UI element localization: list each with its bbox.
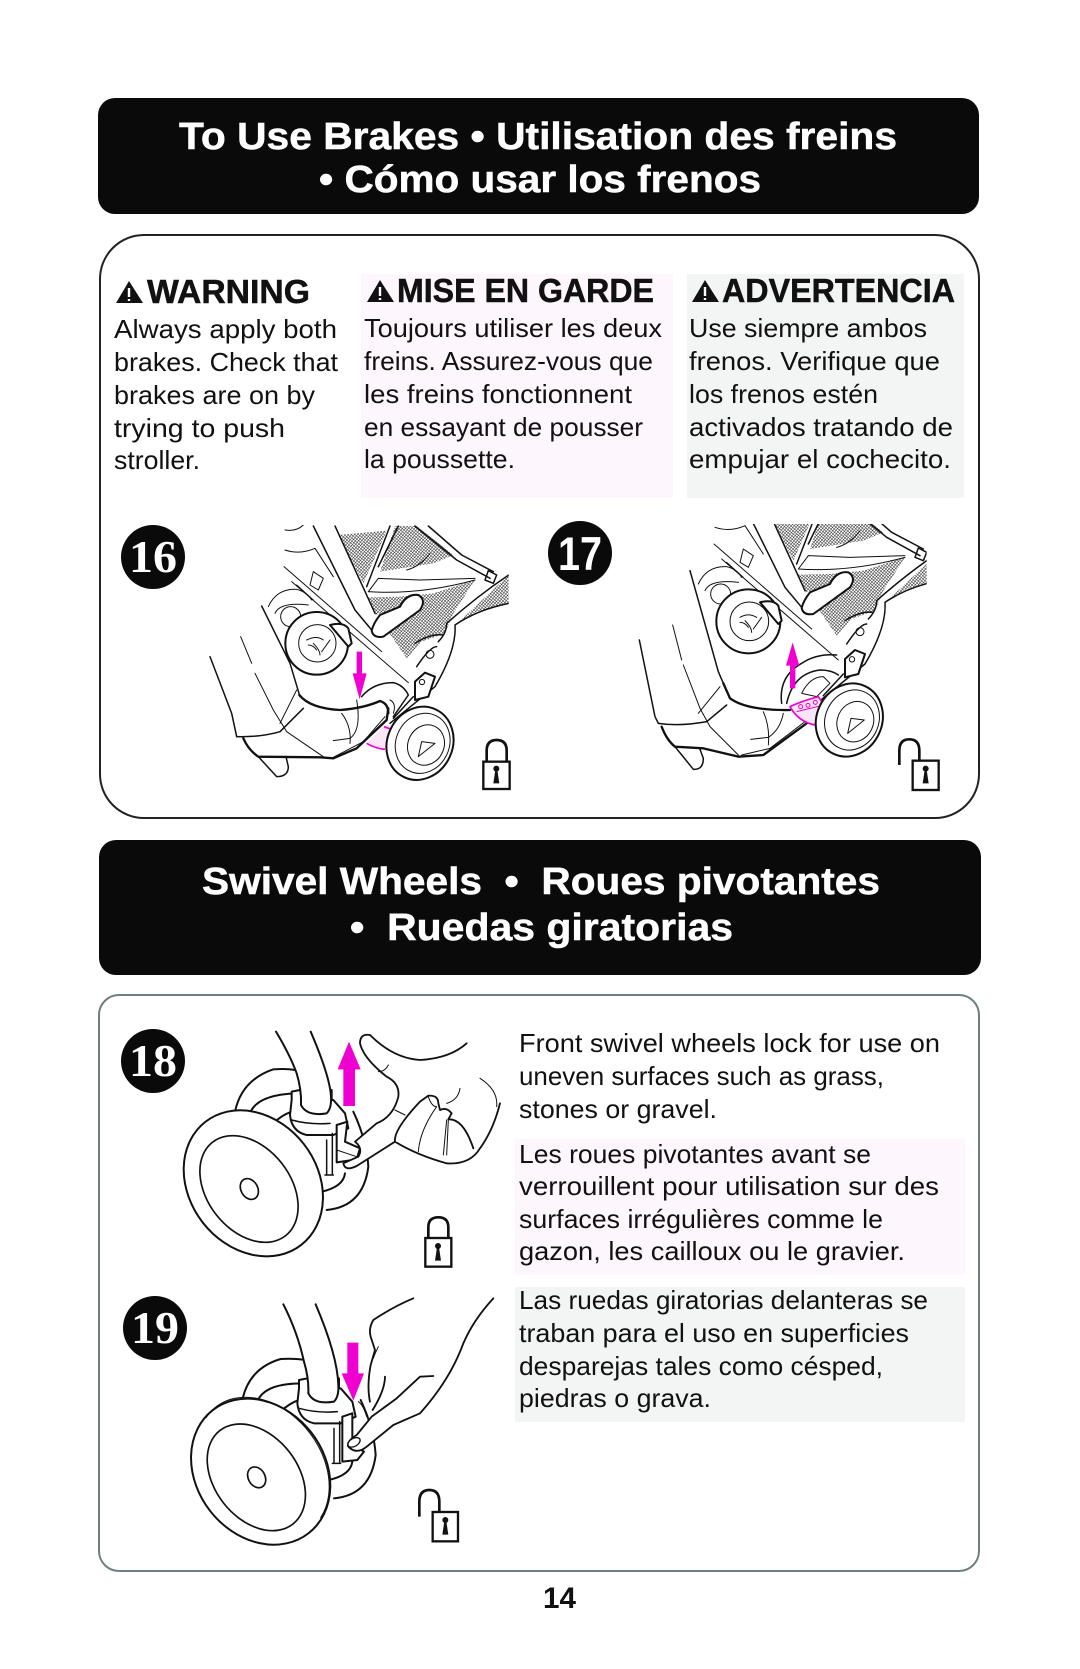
warning column: French bbox=[361, 272, 673, 498]
warning column: Spanish: Use siempre ambos bbox=[689, 313, 927, 343]
header: swivel wheels bbox=[99, 840, 981, 975]
illustration: pressing swivel lock bbox=[162, 1298, 493, 1573]
text block: French bbox=[515, 1139, 965, 1275]
hand bbox=[343, 1035, 500, 1168]
warning column: English: brakes are on by bbox=[114, 380, 315, 410]
text block: Spanish: piedras o grava. bbox=[519, 1383, 711, 1413]
illustration: lifting swivel lock bbox=[155, 1032, 500, 1284]
warning column: Spanish: empujar el cochecito. bbox=[689, 444, 951, 474]
text block: English: stones or gravel. bbox=[519, 1094, 717, 1124]
text block: French: surfaces irrégulières comme le bbox=[519, 1204, 883, 1234]
text block: Spanish: desparejas tales como césped, bbox=[519, 1351, 883, 1381]
leg and boot bbox=[639, 640, 658, 723]
warning column: French: les freins fonctionnent bbox=[364, 379, 633, 409]
warning column: Spanish: frenos. Verifique que bbox=[689, 346, 940, 376]
warning column: French: en essayant de pousser bbox=[364, 412, 643, 442]
arrow: up bbox=[786, 642, 799, 688]
icon: locked padlock bbox=[425, 1217, 451, 1267]
step number 17: 17 bbox=[558, 527, 602, 580]
text block: French: Les roues pivotantes avant se bbox=[519, 1139, 871, 1169]
step number 18 bbox=[121, 1029, 185, 1093]
leg and boot bbox=[210, 657, 237, 737]
step number 16 bbox=[121, 525, 185, 589]
arrow: up bbox=[338, 1042, 361, 1106]
header: swivel wheels: • Ruedas giratorias bbox=[350, 907, 733, 949]
text block: English: Front swivel wheels lock for use on bbox=[519, 1028, 940, 1058]
header: to use brakes: • Cómo usar los frenos bbox=[319, 159, 761, 201]
step number 17 bbox=[548, 521, 612, 585]
warning column: Spanish: ADVERTENCIA bbox=[722, 272, 955, 309]
icon: warning triangle bbox=[116, 281, 143, 303]
warning column: English: WARNING bbox=[147, 273, 310, 310]
warning column: Spanish: activados tratando de bbox=[689, 412, 953, 442]
text block: English: uneven surfaces such as grass, bbox=[519, 1061, 884, 1091]
arrow: down bbox=[342, 1343, 364, 1401]
warning column: Spanish: los frenos estén bbox=[689, 379, 878, 409]
warning column: English: brakes. Check that bbox=[114, 347, 339, 377]
page number: 14 bbox=[543, 1582, 576, 1615]
header: to use brakes bbox=[98, 98, 979, 214]
warning column: French: la poussette. bbox=[364, 444, 515, 474]
step number 16: 16 bbox=[129, 531, 177, 582]
warning column: English: stroller. bbox=[114, 445, 200, 475]
warning column: French: MISE EN GARDE bbox=[397, 272, 654, 309]
text block: Spanish: Las ruedas giratorias delanteras se bbox=[519, 1285, 928, 1315]
hand bbox=[348, 1298, 493, 1451]
text block: French: gazon, les cailloux ou le gravier. bbox=[519, 1236, 905, 1266]
arrow: down bbox=[353, 652, 367, 699]
panel: brakes bbox=[100, 235, 979, 818]
header: swivel wheels: Swivel Wheels • Roues pivotantes bbox=[202, 861, 880, 903]
icon: warning triangle bbox=[692, 280, 719, 302]
warning column: French: Toujours utiliser les deux bbox=[364, 313, 662, 343]
header: to use brakes: To Use Brakes • Utilisation des freins bbox=[179, 116, 897, 158]
step number 19: 19 bbox=[131, 1302, 179, 1353]
front wheel bbox=[375, 696, 465, 791]
warning column: English: trying to push bbox=[114, 413, 285, 443]
step number 19 bbox=[123, 1296, 187, 1360]
icon: warning triangle bbox=[367, 280, 394, 302]
text block: French: verrouillent pour utilisation sur des bbox=[519, 1171, 939, 1201]
illustration: foot lifting brake bbox=[638, 524, 927, 770]
icon: locked padlock bbox=[483, 740, 510, 789]
warning column: French: freins. Assurez-vous que bbox=[364, 346, 653, 376]
front wheel bbox=[804, 672, 895, 768]
warning column: English bbox=[114, 273, 339, 475]
pedal bbox=[367, 724, 395, 749]
icon: unlocked padlock bbox=[419, 1490, 458, 1541]
text block: Spanish bbox=[515, 1285, 965, 1422]
warning column: Spanish bbox=[687, 272, 964, 498]
text block: Spanish: traban para el uso en superficies bbox=[519, 1318, 909, 1348]
warning column: English: Always apply both bbox=[114, 314, 337, 344]
illustration: foot pressing brake bbox=[210, 525, 509, 791]
step number 18: 18 bbox=[129, 1035, 177, 1086]
pedal bbox=[790, 697, 823, 725]
icon: unlocked padlock bbox=[899, 739, 939, 790]
panel: swivel wheels bbox=[99, 995, 979, 1573]
text block: English bbox=[519, 1028, 940, 1124]
